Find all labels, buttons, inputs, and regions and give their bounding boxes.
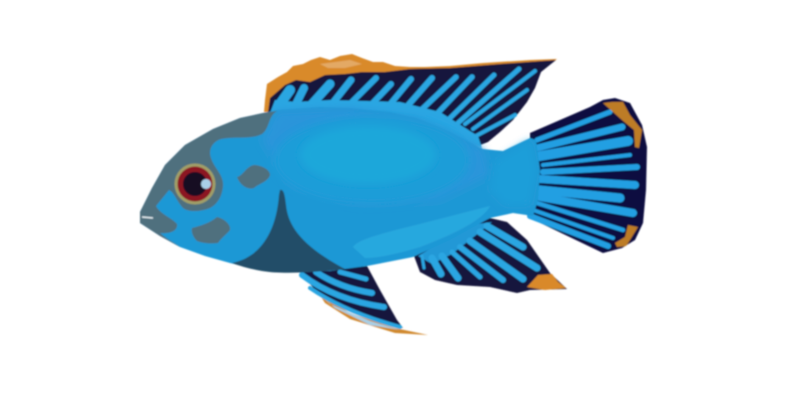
orange edge pale highlight [320, 60, 362, 68]
pelvic fin [298, 266, 428, 335]
dorsal fin blue rays [280, 69, 535, 137]
body [140, 107, 540, 273]
eye tan ring [174, 164, 216, 204]
dorsal fin base [270, 100, 482, 148]
anal fin [414, 218, 567, 293]
head grey mask [140, 111, 277, 247]
tail navy membrane [530, 98, 647, 253]
pelvic fin light edge [298, 274, 400, 330]
tail fin [530, 98, 647, 253]
fish drawing [140, 54, 647, 335]
dorsal fin navy membrane [268, 60, 556, 146]
tail orange bottom patch [615, 225, 638, 247]
anal fin orange tip [527, 274, 566, 290]
eye pupil [183, 172, 207, 196]
anal fin blue rays [422, 226, 537, 280]
anal fin navy membrane [414, 218, 567, 293]
pelvic fin blue rays [302, 272, 400, 327]
tail orange top patch [603, 102, 642, 148]
tail blue rays [530, 112, 637, 246]
pelvic fin navy membrane [300, 266, 403, 328]
tail peduncle highlight [490, 140, 536, 205]
eye red iris [178, 166, 212, 202]
body central highlight [300, 126, 436, 184]
eye highlight [201, 179, 211, 189]
upper body tone [262, 108, 490, 205]
pectoral dark patch [232, 190, 345, 273]
body lighter flank [274, 116, 470, 204]
mouth line [142, 217, 153, 218]
body base [140, 107, 540, 272]
anal fin base [418, 222, 492, 264]
belly highlight [353, 206, 490, 258]
jaw spot [192, 217, 230, 243]
dorsal fin orange edge [264, 54, 557, 112]
dorsal fin [264, 54, 557, 148]
eye [174, 164, 216, 204]
pelvic fin orange trailing edge [318, 292, 428, 335]
cheek spot [237, 165, 270, 188]
